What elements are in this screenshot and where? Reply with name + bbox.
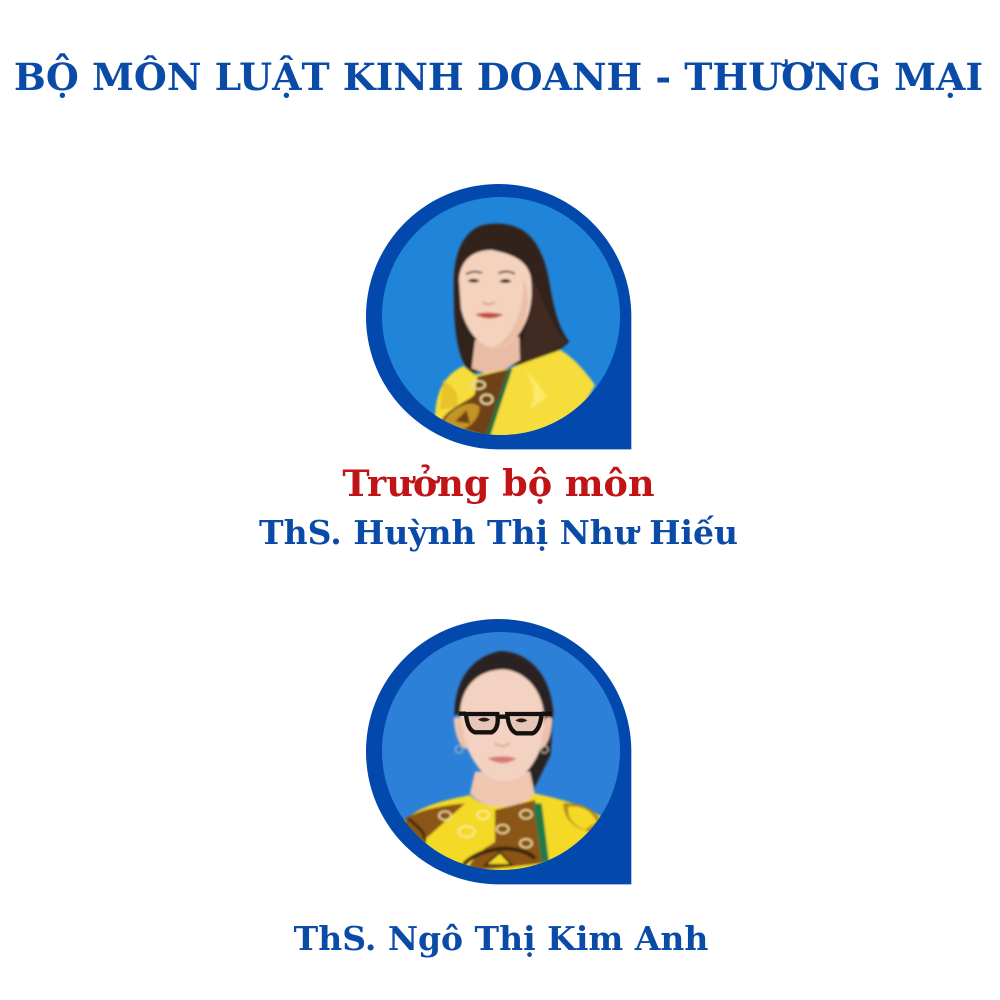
role label: Trưởng bộ môn — [342, 462, 655, 505]
portrait: Huỳnh Thị Như Hiếu — [366, 184, 631, 449]
teardrop frame — [366, 619, 631, 884]
portrait: Ngô Thị Kim Anh — [366, 619, 631, 884]
name: Huỳnh Thị Như Hiếu: ThS. Huỳnh Thị Như Hiếu — [259, 513, 738, 552]
teardrop frame — [366, 184, 631, 449]
photo — [380, 628, 627, 875]
name: Ngô Thị Kim Anh: ThS. Ngô Thị Kim Anh — [294, 919, 708, 958]
photo — [380, 193, 627, 443]
glasses — [459, 714, 552, 733]
title: BỘ MÔN LUẬT KINH DOANH - THƯƠNG MẠI — [14, 53, 983, 99]
